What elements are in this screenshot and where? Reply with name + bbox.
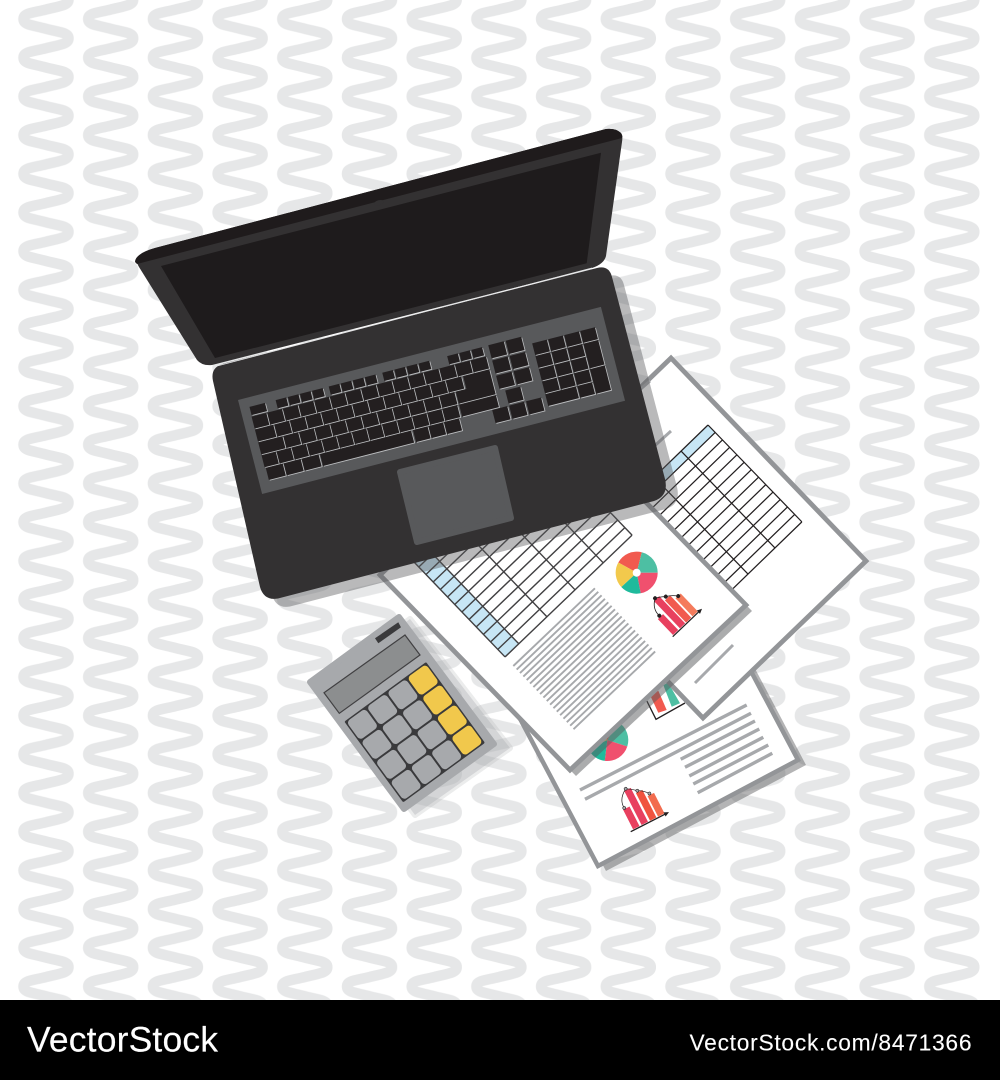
text lines on back sheet <box>580 705 772 799</box>
pie chart on back sheet <box>581 713 634 766</box>
pie chart on front sheet <box>616 552 658 594</box>
calculator display <box>324 635 420 713</box>
partially hidden bar chart on back sheet <box>647 683 685 719</box>
footer bar <box>0 1000 1000 1080</box>
laptop <box>135 129 678 607</box>
text lines on table sheet <box>636 381 733 683</box>
table on front sheet <box>412 438 632 657</box>
bar chart on front sheet <box>644 578 704 638</box>
calculator <box>310 617 510 815</box>
footer image id: VectorStock.com/8471366 <box>690 1030 972 1056</box>
calculator keypad <box>344 662 485 802</box>
paragraph lines on front sheet <box>513 588 655 729</box>
bar chart on back sheet <box>612 775 670 834</box>
document: table sheet on the right <box>508 358 866 718</box>
footer brand: VectorStock <box>27 1020 218 1060</box>
trackpad <box>400 448 511 542</box>
document: back sheet with charts <box>481 539 806 871</box>
table on right sheet <box>586 425 802 640</box>
laptop base <box>212 267 666 599</box>
keyboard <box>238 307 625 494</box>
document: front sheet with table and charts <box>380 410 752 776</box>
laptop webcam <box>374 199 384 206</box>
laptop lid <box>137 129 622 365</box>
laptop screen <box>161 153 601 358</box>
calculator speaker <box>375 622 401 643</box>
